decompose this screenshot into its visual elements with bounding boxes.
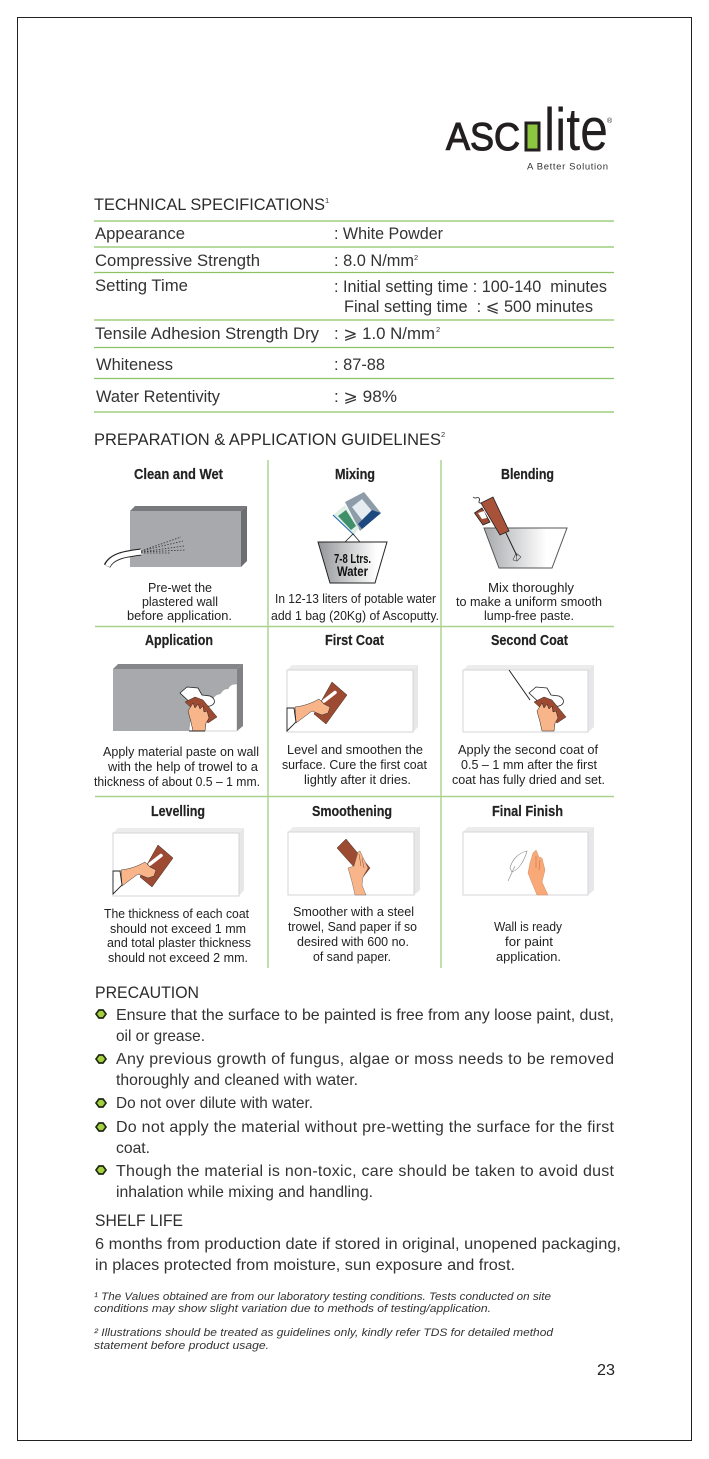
panel: first coat: lightly after it dries. (304, 773, 411, 787)
precaution list: Though the material is non-toxic, care should be taken to avoid dust (116, 1163, 615, 1180)
precaution list: inhalation while mixing and handling. (116, 1184, 373, 1201)
shelf life text (95, 1236, 621, 1274)
precaution list: Any previous growth of fungus, algae or moss needs to be removed (116, 1051, 614, 1068)
panel: application: with the help of trowel to a (107, 760, 258, 774)
panel: application (94, 633, 260, 789)
panel: levelling: should not exceed 1 mm (110, 922, 246, 936)
panel: final finish: Final Finish (492, 804, 563, 820)
icon: wall with trowel (113, 664, 243, 731)
icon: hand with sanding block (288, 827, 420, 895)
bullet 3 (96, 1099, 106, 1107)
icon: product bag (333, 492, 381, 535)
panel: first coat: surface. Cure the first coat (282, 758, 428, 772)
panel: mixing: add 1 bag (20Kg) of Ascoputty. (271, 609, 439, 623)
panel: blending: Blending (501, 467, 554, 483)
logo: Ascolite: A Better Solution (527, 162, 608, 172)
bullet 5 (96, 1166, 106, 1174)
precaution list: thoroughly and cleaned with water. (116, 1072, 358, 1089)
panel: levelling: The thickness of each coat (104, 907, 250, 921)
specifications table: Setting Time (95, 277, 188, 295)
panel: levelling (104, 804, 251, 965)
heading: technical specifications: 1 (325, 196, 329, 205)
panel: mixing: In 12-13 liters of potable water (275, 592, 436, 606)
icon: wall with hose spray (107, 506, 247, 567)
panel: application: thickness of about 0.5 – 1 mm. (94, 775, 260, 789)
specifications table: : 8.0 N/mm (334, 252, 414, 270)
panel: second coat: Second Coat (491, 633, 568, 649)
panel: clean and wet: Clean and Wet (134, 467, 223, 483)
precaution list: oil or grease. (116, 1028, 205, 1045)
panel: final finish: application. (496, 950, 561, 964)
specifications table: : White Powder (334, 225, 443, 243)
panel: blending (456, 467, 602, 623)
panel: levelling: Levelling (151, 804, 205, 820)
precaution list: coat. (116, 1140, 150, 1157)
specifications table: Tensile Adhesion Strength Dry (95, 325, 320, 343)
panel: second coat (452, 633, 605, 787)
precaution list: Ensure that the surface to be painted is free from any loose paint, dust, (116, 1007, 614, 1024)
panel: smoothening: of sand paper. (313, 950, 391, 964)
panel: second coat: coat has fully dried and set. (452, 773, 605, 787)
logo: Ascolite (446, 96, 613, 172)
panel: smoothening: desired with 600 no. (297, 935, 409, 949)
icon: white wall with horizontal hand (287, 665, 418, 732)
panel: application: Application (145, 633, 213, 649)
panel: smoothening: Smoothening (312, 804, 392, 820)
panel: clean and wet: before application. (127, 609, 232, 623)
specifications table: Water Retentivity (96, 388, 221, 406)
panel: blending: to make a uniform smooth (456, 595, 602, 609)
heading: preparation and application guidelines: PREPARATION & APPLICATION GUIDELINES (94, 431, 441, 449)
heading: technical specifications: TECHNICAL SPECIFICATIONS (94, 196, 325, 214)
footnote 1: conditions may show slight variation due to methods of testing/application. (94, 1303, 491, 1315)
heading: preparation and application guidelines: 2 (441, 430, 445, 439)
specifications table: : ⩾ 1.0 N/mm (334, 325, 435, 343)
panel: clean and wet (107, 467, 247, 623)
panel: second coat: Apply the second coat of (458, 743, 599, 757)
panel: final finish: for paint (505, 935, 554, 949)
page number: 23 (597, 1362, 615, 1379)
bullet 4 (96, 1123, 106, 1131)
panel: clean and wet: plastered wall (142, 595, 218, 609)
icon: wall with trowel and guide line (463, 665, 594, 732)
panel: smoothening: Smoother with a steel (293, 905, 414, 919)
specifications table (94, 221, 614, 412)
precaution list: Do not over dilute with water. (116, 1095, 313, 1112)
specifications table: 2 (436, 325, 440, 334)
panel: smoothening (288, 804, 420, 964)
logo: Ascolite: lite (544, 96, 608, 163)
panel: levelling: should not exceed 2 mm. (108, 951, 248, 965)
specifications table: : Initial setting time : 100-140 minutes (334, 278, 607, 296)
panel: mixing (271, 467, 439, 623)
panel: smoothening: trowel, Sand paper if so (288, 920, 417, 934)
footnote 2 (94, 1327, 554, 1352)
shelf life text: 6 months from production date if stored in original, unopened packaging, (95, 1236, 621, 1253)
icon: white wall with horizontal hand (113, 828, 244, 896)
footnote 2: ² Illustrations should be treated as guidelines only, kindly refer TDS for detailed method (94, 1327, 554, 1339)
panel: mixing: Mixing (335, 467, 375, 483)
icon: water bucket: Water (337, 564, 369, 579)
panel: application: Apply material paste on wall (103, 745, 259, 759)
specifications table: Appearance (95, 225, 185, 243)
bullet 1 (96, 1010, 106, 1018)
logo: Ascolite: ® (607, 117, 613, 125)
heading: precaution: PRECAUTION (95, 984, 199, 1002)
specifications table: Final setting time : ⩽ 500 minutes (344, 298, 593, 316)
logo: Ascolite: ASC (446, 116, 520, 159)
footnote 1: ¹ The Values obtained are from our laboratory testing conditions. Tests conducted on site (94, 1291, 551, 1303)
specifications table: : ⩾ 98% (334, 388, 397, 406)
bullet 2 (96, 1055, 106, 1063)
footnote 2: statement before product usage. (94, 1340, 269, 1352)
panel: second coat: 0.5 – 1 mm after the first (461, 758, 598, 772)
precaution list: Do not apply the material without pre-wetting the surface for the first (116, 1119, 615, 1136)
shelf life text: in places protected from moisture, sun exposure and frost. (95, 1257, 515, 1274)
specifications table: : 87-88 (334, 356, 385, 374)
heading: shelf life: SHELF LIFE (95, 1212, 183, 1230)
specifications table: Whiteness (96, 356, 173, 374)
panel: first coat: Level and smoothen the (287, 743, 423, 757)
footnote 1 (94, 1291, 551, 1315)
icon: mixer in bowl (473, 497, 567, 568)
panel: first coat: First Coat (325, 633, 384, 649)
panel: first coat (282, 633, 428, 787)
panel: clean and wet: Pre-wet the (148, 581, 212, 595)
icon: water bucket: 7-8 Ltrs. (334, 551, 371, 566)
panel: final finish: Wall is ready (494, 920, 563, 934)
specifications table: Compressive Strength (95, 252, 260, 270)
icon: hand and feather (463, 827, 594, 895)
specifications table: 2 (414, 253, 418, 262)
panel: levelling: and total plaster thickness (107, 936, 251, 950)
precaution list (96, 1007, 615, 1201)
panel: final finish (463, 804, 594, 964)
icon: water bucket (318, 534, 387, 583)
panel: blending: Mix thoroughly (488, 581, 575, 595)
panel: blending: lump-free paste. (484, 609, 574, 623)
